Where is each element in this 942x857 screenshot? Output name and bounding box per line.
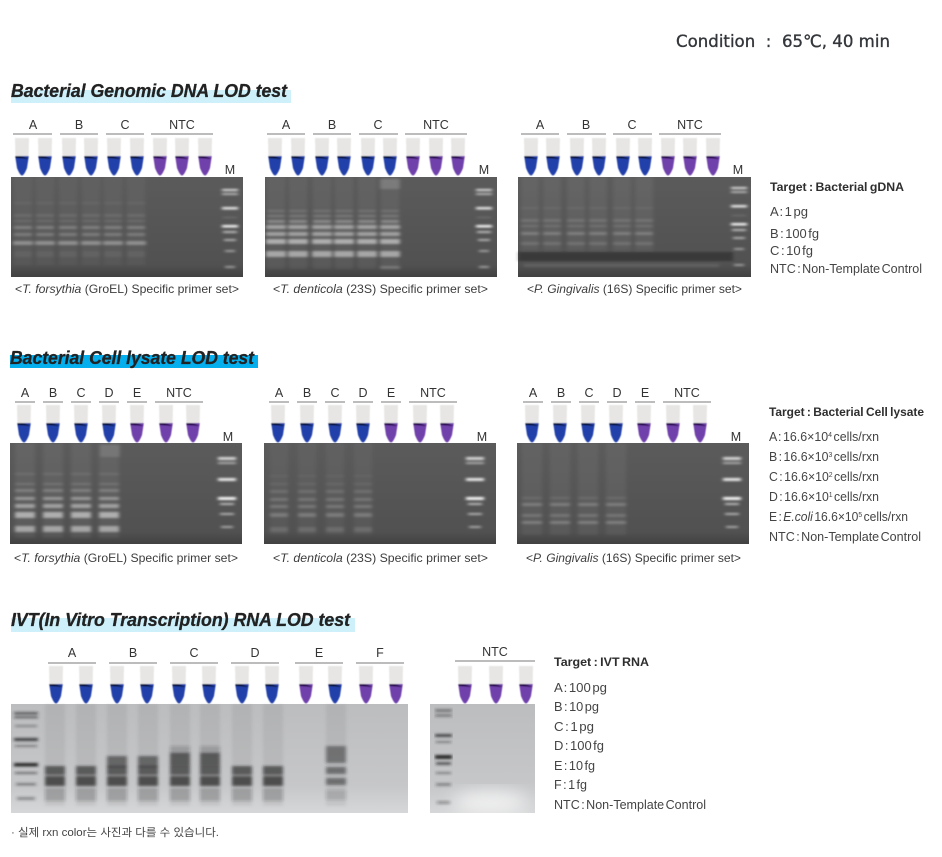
section: bacterial genomic DNA LOD test bbox=[11, 81, 922, 296]
sample labels: NTC bbox=[423, 118, 449, 132]
legend: bacterial cell lysate: D : 16.6×10 bbox=[769, 490, 830, 504]
heading: bacterial cell lysate: Bacterial Cell lysate LOD test bbox=[10, 348, 255, 368]
gel image bbox=[518, 177, 751, 277]
sample labels: E bbox=[641, 386, 649, 400]
sample labels: C bbox=[373, 118, 383, 132]
reaction tubes bbox=[271, 405, 454, 442]
sample labels: D bbox=[612, 386, 622, 400]
sample labels bbox=[269, 386, 487, 444]
legend: bacterial cell lysate: cells/rxn bbox=[832, 450, 879, 464]
NTC label: NTC bbox=[482, 645, 508, 659]
sample labels: M bbox=[477, 430, 487, 444]
sample labels: M bbox=[225, 163, 235, 177]
legend: bacterial cell lysate: B : 16.6×10 bbox=[769, 450, 829, 464]
legend: bacterial cell lysate: cells/rxn bbox=[832, 430, 879, 444]
gel image bbox=[11, 704, 408, 813]
caption: <T. forsythia (GroEL) Specific primer set> bbox=[15, 282, 239, 296]
sample labels: NTC bbox=[674, 386, 700, 400]
footnote: · 실제 rxn color는 사진과 다를 수 있습니다. bbox=[11, 826, 219, 839]
legend: bacterial gDNA: C : 10 fg bbox=[770, 244, 813, 258]
sample labels: B bbox=[328, 118, 336, 132]
sample labels: C bbox=[76, 386, 86, 400]
sample labels: C bbox=[584, 386, 594, 400]
reaction tubes bbox=[524, 138, 720, 176]
legend: IVT RNA bbox=[554, 655, 706, 812]
panel: P. gingivalis gDNA bbox=[518, 118, 751, 296]
condition heading: Condition : 65℃, 40 min bbox=[676, 32, 890, 52]
legend: IVT RNA: B : 10 pg bbox=[554, 700, 599, 714]
sample labels: A bbox=[282, 118, 291, 132]
sample labels: D bbox=[250, 646, 260, 660]
legend: bacterial cell lysate: NTC : Non-Template Control bbox=[769, 530, 921, 544]
legend: bacterial cell lysate: 1 bbox=[829, 492, 833, 499]
heading: IVT RNA: IVT(In Vitro Transcription) RNA LOD test bbox=[11, 610, 351, 630]
sample labels: B bbox=[557, 386, 565, 400]
reaction tubes bbox=[17, 405, 200, 442]
reaction tubes bbox=[49, 666, 403, 704]
gel image bbox=[430, 704, 535, 813]
gel image bbox=[264, 443, 496, 544]
sample labels bbox=[523, 386, 741, 444]
sample labels: A bbox=[529, 386, 538, 400]
legend: bacterial cell lysate: cells/rxn bbox=[833, 490, 879, 504]
sample labels: D bbox=[358, 386, 368, 400]
legend: IVT RNA: NTC : Non-Template Control bbox=[554, 798, 706, 812]
sample labels: E bbox=[387, 386, 395, 400]
legend: IVT RNA: Target : IVT RNA bbox=[554, 655, 649, 669]
sample labels: M bbox=[479, 163, 489, 177]
caption: <T. denticola (23S) Specific primer set> bbox=[273, 282, 488, 296]
legend: bacterial cell lysate: cells/rxn bbox=[862, 510, 908, 524]
legend: bacterial cell lysate: C : 16.6×10 bbox=[769, 470, 830, 484]
legend: bacterial gDNA: B : 100 fg bbox=[770, 227, 819, 241]
sample labels: NTC bbox=[420, 386, 446, 400]
sample labels: B bbox=[129, 646, 137, 660]
legend: IVT RNA: C : 1 pg bbox=[554, 720, 594, 734]
reaction tubes bbox=[458, 666, 533, 704]
sample labels bbox=[48, 646, 404, 663]
sample labels: C bbox=[330, 386, 340, 400]
panel: T. denticola gDNA bbox=[265, 118, 497, 296]
panel: T. forsythia gDNA bbox=[11, 118, 243, 296]
sample labels: A bbox=[29, 118, 38, 132]
panel: IVT RNA NTC gel bbox=[430, 645, 535, 813]
panel: P. gingivalis lysate bbox=[517, 386, 749, 565]
legend: bacterial cell lysate: 5 bbox=[858, 512, 862, 519]
sample labels: A bbox=[536, 118, 545, 132]
reaction tubes bbox=[15, 138, 212, 176]
sample labels: NTC bbox=[677, 118, 703, 132]
caption: <T. denticola (23S) Specific primer set> bbox=[273, 551, 488, 565]
legend: bacterial cell lysate: Target : Bacterial Cell lysate bbox=[769, 405, 924, 419]
section: bacterial cell lysate LOD test bbox=[10, 348, 924, 565]
sample labels: C bbox=[120, 118, 130, 132]
legend: IVT RNA: A : 100 pg bbox=[554, 681, 607, 695]
sample labels bbox=[521, 118, 743, 177]
sample labels: A bbox=[68, 646, 77, 660]
panel: T. forsythia lysate bbox=[10, 386, 242, 565]
panel: IVT RNA samples gel bbox=[11, 646, 408, 813]
sample labels: B bbox=[303, 386, 311, 400]
sample labels bbox=[13, 118, 235, 177]
legend: bacterial cell lysate: 3 bbox=[828, 452, 832, 459]
gel image bbox=[265, 177, 497, 277]
sample labels bbox=[267, 118, 489, 177]
sample labels: D bbox=[104, 386, 114, 400]
legend: bacterial cell lysate: 4 bbox=[828, 432, 832, 439]
legend: IVT RNA: F : 1 fg bbox=[554, 778, 587, 792]
legend: bacterial gDNA bbox=[770, 180, 922, 276]
heading: bacterial genomic DNA: Bacterial Genomic DNA LOD test bbox=[11, 81, 288, 101]
NTC label bbox=[455, 645, 535, 661]
legend: bacterial cell lysate: E : E.coli 16.6×10 bbox=[769, 510, 860, 524]
sample labels bbox=[15, 386, 233, 444]
legend: bacterial cell lysate: 2 bbox=[829, 472, 833, 479]
sample labels: B bbox=[582, 118, 590, 132]
legend: bacterial gDNA: NTC : Non-Template Control bbox=[770, 262, 922, 276]
legend: bacterial cell lysate: A : 16.6×10 bbox=[769, 430, 829, 444]
sample labels: M bbox=[731, 430, 741, 444]
sample labels: E bbox=[133, 386, 141, 400]
section: IVT RNA LOD test bbox=[11, 610, 706, 813]
sample labels: A bbox=[275, 386, 284, 400]
sample labels: M bbox=[733, 163, 743, 177]
caption: <P. Gingivalis (16S) Specific primer set> bbox=[527, 282, 742, 296]
legend: bacterial cell lysate bbox=[769, 405, 924, 544]
gel image bbox=[10, 443, 242, 544]
legend: bacterial gDNA: A : 1 pg bbox=[770, 205, 808, 219]
reaction tubes bbox=[268, 138, 465, 176]
sample labels: NTC bbox=[169, 118, 195, 132]
sample labels: E bbox=[315, 646, 323, 660]
sample labels: C bbox=[627, 118, 637, 132]
sample labels: C bbox=[189, 646, 199, 660]
gel image bbox=[11, 177, 243, 277]
caption: <T. forsythia (GroEL) Specific primer set> bbox=[14, 551, 238, 565]
legend: IVT RNA: D : 100 fg bbox=[554, 739, 604, 753]
sample labels: B bbox=[75, 118, 83, 132]
sample labels: A bbox=[21, 386, 30, 400]
legend: bacterial gDNA: Target : Bacterial gDNA bbox=[770, 180, 904, 194]
gel image bbox=[517, 443, 749, 544]
legend: IVT RNA: E : 10 fg bbox=[554, 759, 595, 773]
reaction tubes bbox=[525, 405, 707, 442]
sample labels: B bbox=[49, 386, 57, 400]
sample labels: NTC bbox=[166, 386, 192, 400]
sample labels: M bbox=[223, 430, 233, 444]
sample labels: F bbox=[376, 646, 384, 660]
legend: bacterial cell lysate: cells/rxn bbox=[833, 470, 879, 484]
panel: T. denticola lysate bbox=[264, 386, 496, 565]
caption: <P. Gingivalis (16S) Specific primer set> bbox=[526, 551, 741, 565]
